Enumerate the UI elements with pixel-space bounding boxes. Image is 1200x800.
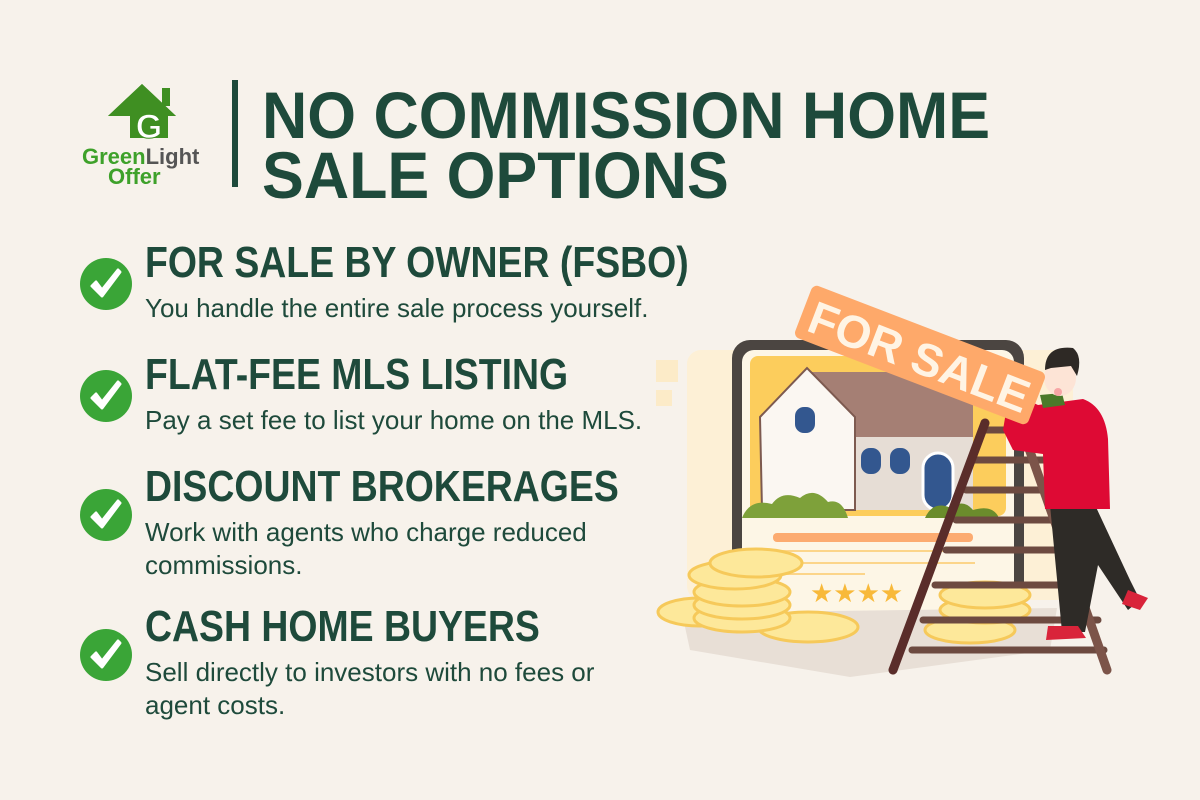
house xyxy=(742,368,999,518)
item 1 xyxy=(80,238,689,323)
item 4: Sell directly to investors with no fees or xyxy=(145,657,594,687)
ladder xyxy=(893,423,1107,670)
icon: house G: G xyxy=(136,108,162,146)
icon: check xyxy=(80,489,132,541)
title: SALE OPTIONS xyxy=(262,138,729,212)
icon: check xyxy=(80,370,132,422)
tablet xyxy=(732,340,1024,625)
item 3: DISCOUNT BROKERAGES xyxy=(145,462,619,511)
base plate xyxy=(682,608,1057,677)
listing lines and stars xyxy=(773,533,975,609)
listing lines and stars: ★★★★ xyxy=(810,579,903,609)
item 3 xyxy=(80,462,619,580)
sign: FOR SALE: FOR SALE xyxy=(801,291,1037,423)
item 3: commissions. xyxy=(145,550,302,580)
icon: check xyxy=(80,258,132,310)
item 2 xyxy=(80,350,642,435)
icon: check xyxy=(80,629,132,681)
item 1: FOR SALE BY OWNER (FSBO) xyxy=(145,238,689,287)
illustration: for sale xyxy=(656,286,1148,677)
coins xyxy=(658,549,1030,643)
title xyxy=(262,78,990,212)
title: NO COMMISSION HOME xyxy=(262,78,990,152)
item 4: agent costs. xyxy=(145,690,285,720)
item 1: You handle the entire sale process yourself. xyxy=(145,293,648,323)
divider bar xyxy=(232,80,238,187)
item 2: FLAT-FEE MLS LISTING xyxy=(145,350,568,399)
item 4: CASH HOME BUYERS xyxy=(145,602,540,651)
logo text xyxy=(82,144,200,189)
logo xyxy=(82,84,200,188)
item 4 xyxy=(80,602,594,720)
item 2: Pay a set fee to list your home on the MLS. xyxy=(145,405,642,435)
logo text: GreenLight xyxy=(82,144,200,169)
item 3: Work with agents who charge reduced xyxy=(145,517,587,547)
man xyxy=(993,348,1148,640)
